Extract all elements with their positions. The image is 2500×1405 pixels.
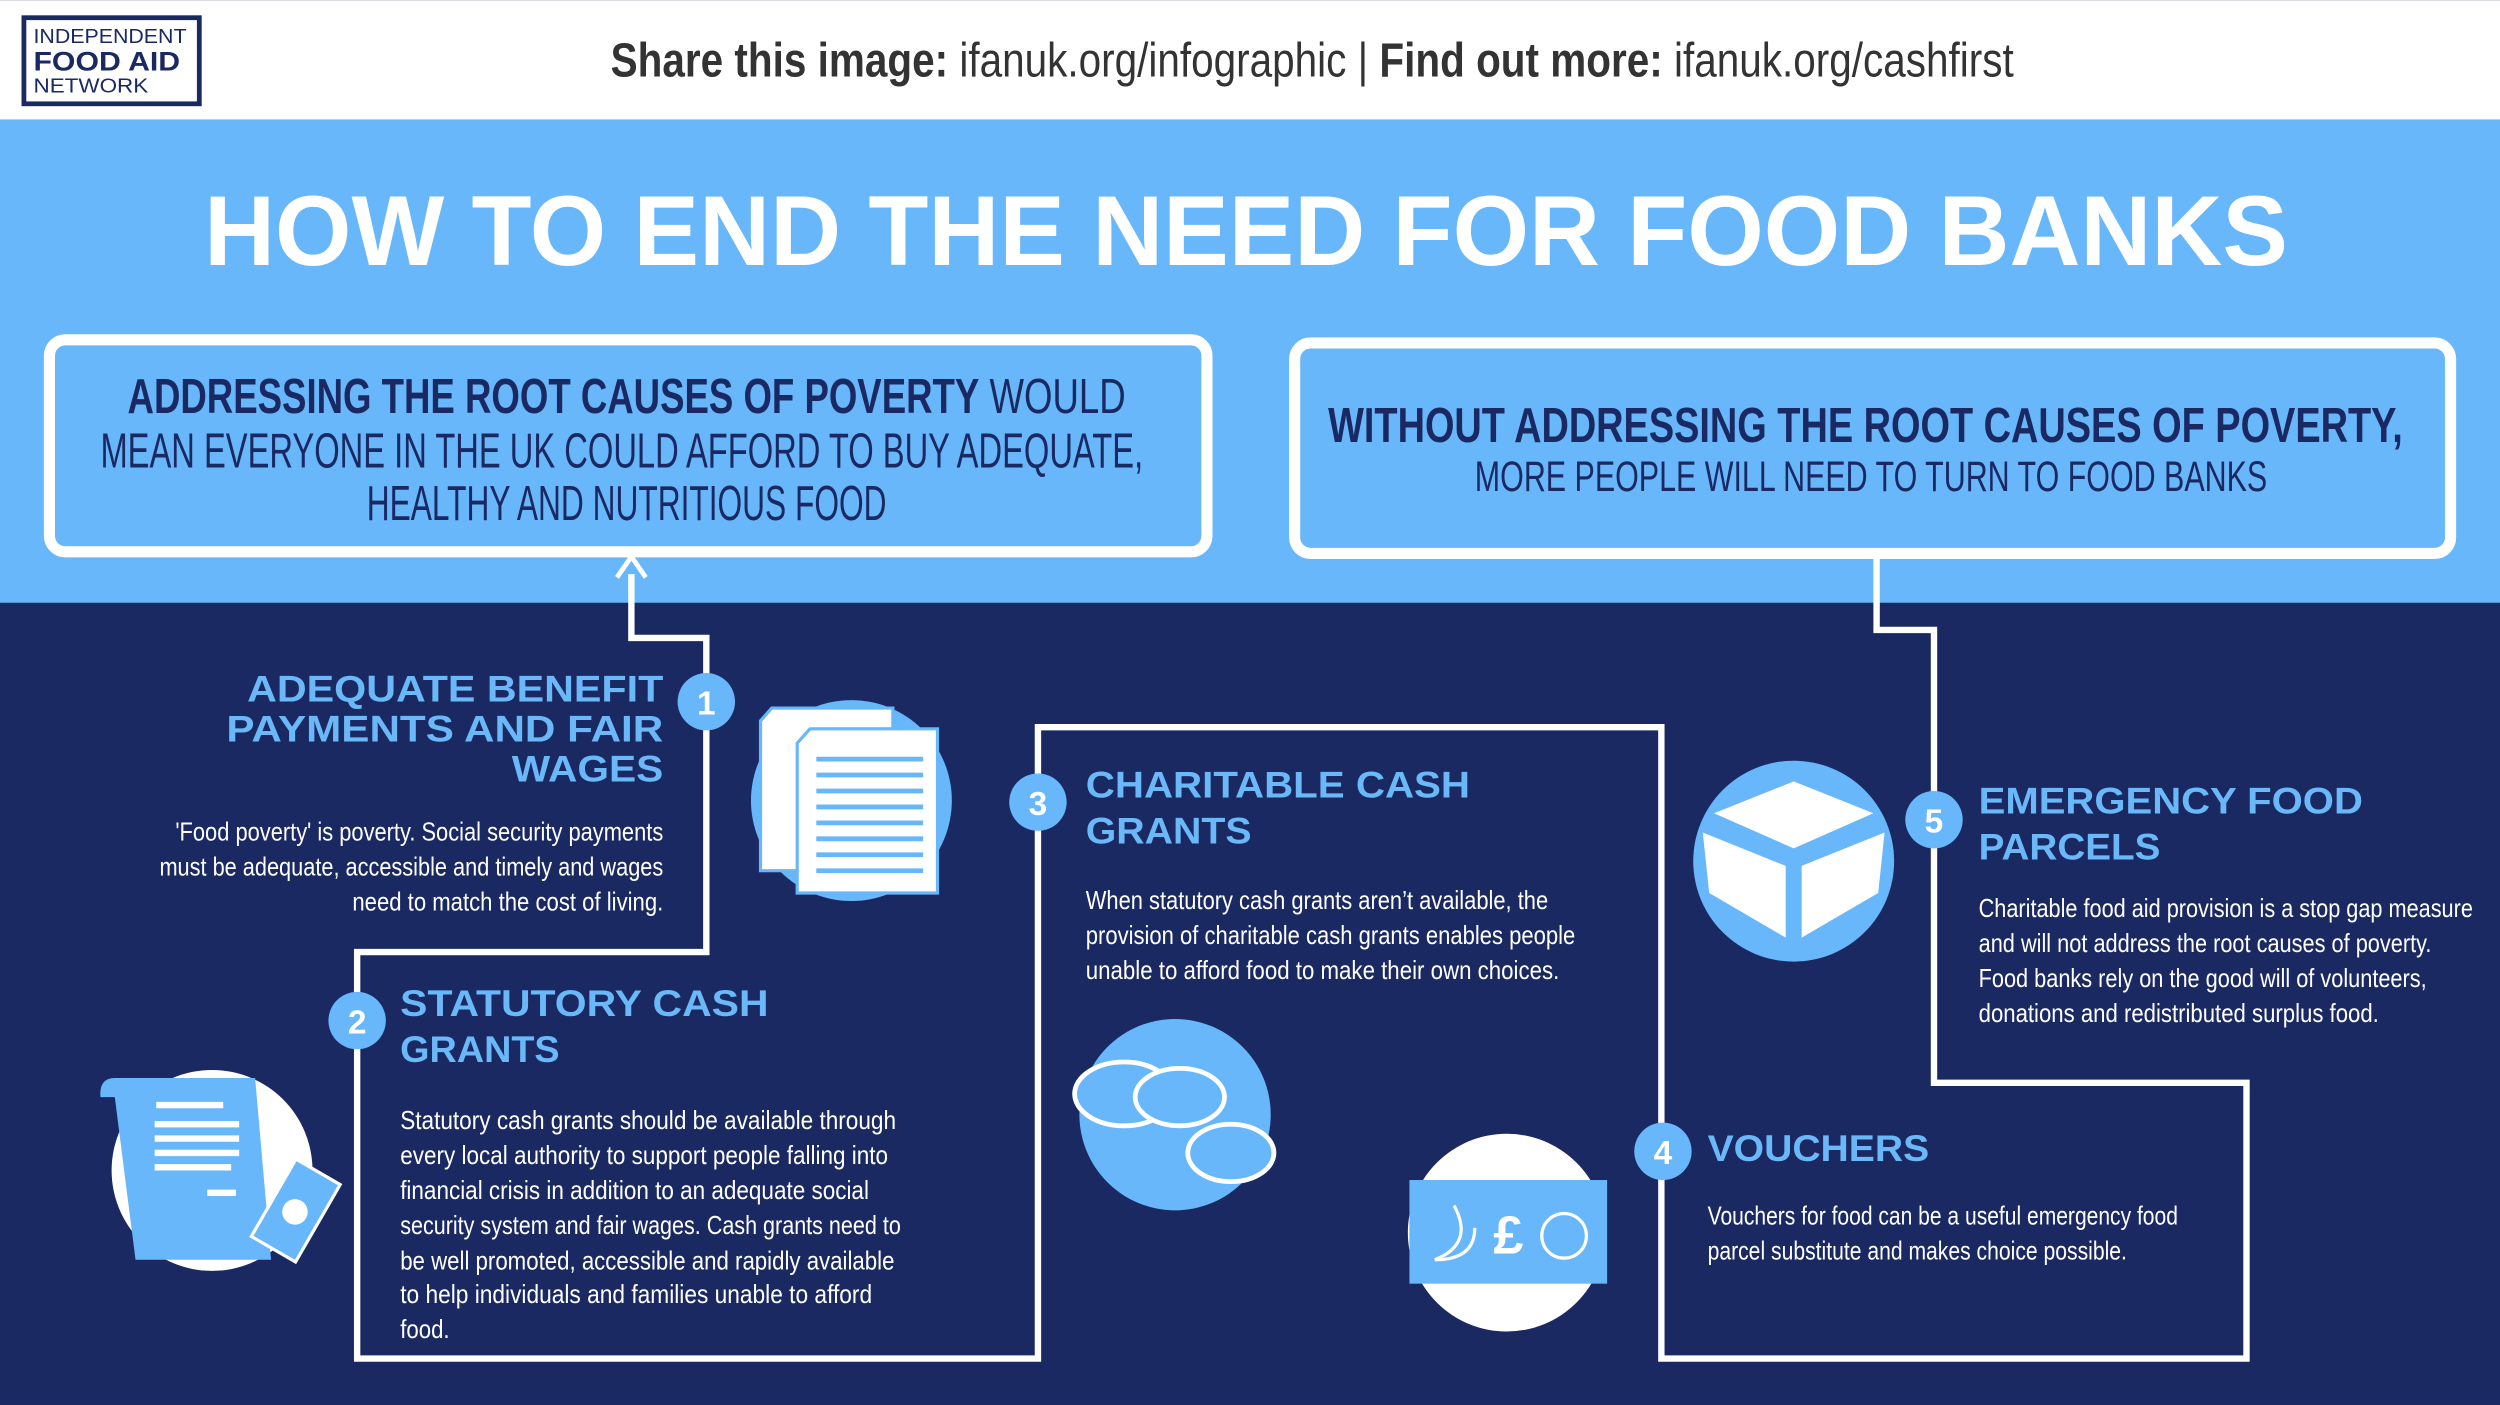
- box: addressing root causes: ADDRESSING THE ROOT CAUSES OF POVERTY WOULD: [128, 369, 1126, 424]
- light blue band: [0, 120, 2500, 603]
- step 3: GRANTS: [1086, 811, 1252, 852]
- step 1: 'Food poverty' is poverty. Social security payments: [175, 818, 663, 846]
- icon: box: [1693, 761, 1894, 962]
- step 3: 3: [1029, 786, 1047, 823]
- step 5: EMERGENCY FOOD: [1979, 780, 2363, 821]
- step 2: be well promoted, accessible and rapidly available: [400, 1247, 894, 1275]
- logo: NETWORK: [33, 75, 148, 98]
- step 1: 1: [697, 685, 716, 722]
- step 2: [328, 983, 901, 1344]
- box: addressing root causes: HEALTHY AND NUTRITIOUS FOOD: [367, 476, 886, 531]
- step 2: GRANTS: [400, 1029, 560, 1070]
- step 2: food.: [400, 1316, 450, 1344]
- step 2: financial crisis in addition to an adequate social: [400, 1177, 869, 1205]
- step 5: Food banks rely on the good will of volunteers,: [1979, 965, 2427, 993]
- step 2: STATUTORY CASH: [400, 983, 768, 1024]
- icon: receipt and cash: [100, 1070, 340, 1271]
- step 2: security system and fair wages. Cash grants need to: [400, 1212, 901, 1240]
- step 2: 2: [348, 1004, 366, 1041]
- step 1: need to match the cost of living.: [352, 889, 663, 917]
- step 4: VOUCHERS: [1708, 1128, 1929, 1169]
- step 3: When statutory cash grants aren’t available, the: [1086, 887, 1548, 915]
- step 4: [1634, 1123, 2178, 1266]
- step 3: CHARITABLE CASH: [1086, 764, 1470, 805]
- step 1: WAGES: [512, 748, 663, 789]
- icon: voucher: [1408, 1134, 1607, 1331]
- step 3: unable to afford food to make their own choices.: [1086, 957, 1559, 985]
- header bar: [0, 0, 2500, 120]
- box: without addressing: [1295, 343, 2451, 553]
- step 2: Statutory cash grants should be available through: [400, 1107, 896, 1135]
- step 5: donations and redistributed surplus food.: [1979, 1000, 2379, 1028]
- step 3: provision of charitable cash grants enables people: [1086, 922, 1575, 950]
- step 4: 4: [1654, 1135, 1673, 1172]
- logo: FOOD AID: [33, 45, 180, 76]
- step 1: must be adequate, accessible and timely and wages: [159, 853, 663, 881]
- icon: documents: [751, 700, 952, 901]
- step 4: Vouchers for food can be a useful emergency food: [1708, 1203, 2178, 1231]
- logo: [24, 18, 199, 104]
- flow path arrow: [357, 557, 2246, 1359]
- share text: Share this image: ifanuk.org/infographic | Find out more: ifanuk.org/cashfirst: [611, 35, 2014, 88]
- step 1: PAYMENTS AND FAIR: [226, 709, 663, 750]
- step 1: ADEQUATE BENEFIT: [247, 669, 663, 710]
- step 2: every local authority to support people falling into: [400, 1142, 888, 1170]
- title: HOW TO END THE NEED FOR FOOD BANKS: [204, 176, 2288, 286]
- dark section: [0, 603, 2500, 1405]
- icon: coins: [1075, 1019, 1274, 1210]
- step 5: [1905, 780, 2473, 1028]
- icon: voucher: £: [1493, 1205, 1523, 1265]
- step 2: to help individuals and families unable to afford: [400, 1281, 872, 1309]
- step 3: [1009, 764, 1575, 985]
- box: addressing root causes: MEAN EVERYONE IN THE UK COULD AFFORD TO BUY ADEQUATE,: [100, 423, 1143, 478]
- step 5: PARCELS: [1979, 827, 2160, 868]
- box: addressing root causes: [49, 340, 1207, 552]
- step 4: parcel substitute and makes choice possible.: [1708, 1238, 2127, 1266]
- logo: INDEPENDENT: [33, 25, 187, 48]
- step 1: [159, 669, 735, 917]
- step 5: 5: [1925, 803, 1943, 840]
- step 5: and will not address the root causes of poverty.: [1979, 930, 2431, 958]
